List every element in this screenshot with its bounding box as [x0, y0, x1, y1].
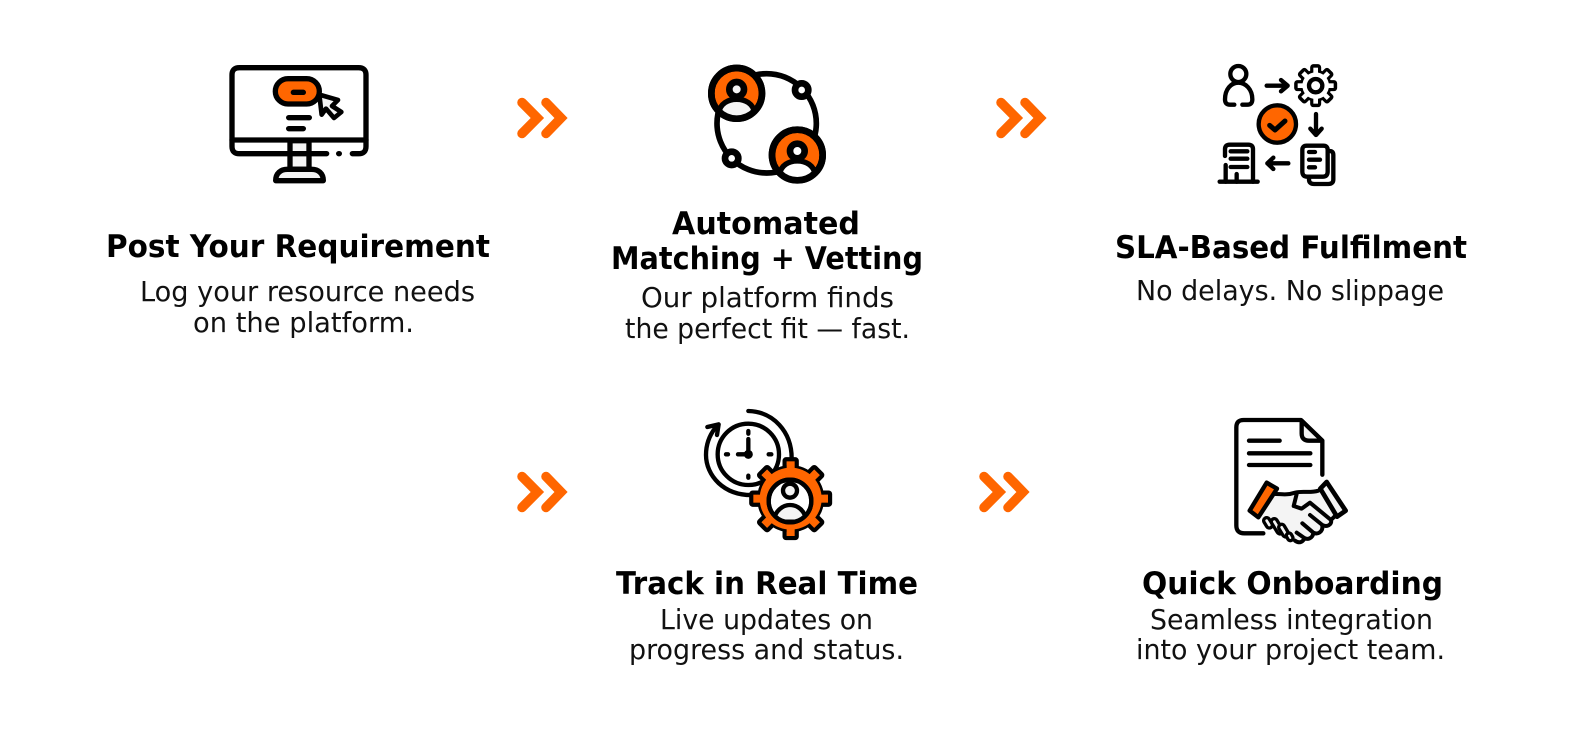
heading: Automated Matching + Vetting: Automated	[672, 206, 860, 242]
description: Seamless integration into your project team.: into your project team.	[1136, 633, 1445, 666]
description: Log your resource needs on the platform.: on the platform.	[193, 306, 414, 339]
description: Log your resource needs on the platform.: Log your resource needs	[140, 275, 475, 308]
arrow: step 2 to step 3	[1001, 102, 1040, 134]
icon: monitor with cursor	[232, 68, 366, 181]
step 1: post your requirement	[106, 68, 490, 339]
description: Log your resource needs on the platform.	[140, 275, 475, 339]
icon: contract with handshake	[1236, 420, 1346, 543]
heading: Post Your Requirement: Post Your Requirement	[106, 229, 490, 265]
icon: SLA workflow cycle	[1220, 66, 1335, 184]
icon: connected people network	[711, 68, 823, 183]
arrow: into step 4	[522, 476, 561, 508]
arrow: step 4 to step 5	[984, 476, 1023, 508]
description: Live updates on progress and status.	[629, 603, 904, 666]
step 3: SLA-based fulfilment	[1115, 66, 1467, 307]
description: Seamless integration into your project team.	[1136, 603, 1445, 666]
heading: Automated Matching + Vetting	[611, 206, 923, 277]
step 4: track in real time	[616, 411, 918, 666]
description: No delays. No slippage: No delays. No slippage	[1136, 274, 1444, 307]
description: Live updates on progress and status.: progress and status.	[629, 633, 904, 666]
description: Live updates on progress and status.: Live updates on	[660, 603, 873, 636]
icon: clock with person gear	[706, 411, 830, 538]
heading: SLA-Based Fulfilment: SLA-Based Fulfilment	[1115, 230, 1467, 266]
description: Our platform finds the perfect fit: Our platform finds	[641, 281, 894, 314]
heading: Automated Matching + Vetting: Matching + Vetting	[611, 241, 923, 277]
description: Seamless integration into your project team.: Seamless integration	[1150, 603, 1433, 636]
description: Our platform finds the perfect fit	[625, 281, 910, 345]
heading: Quick Onboarding: Quick Onboarding	[1142, 566, 1443, 602]
arrow: step 1 to step 2	[522, 102, 561, 134]
heading: Track in Real Time: Track in Real Time	[616, 566, 918, 602]
description: Our platform finds the perfect fit: the perfect fit — fast.	[625, 312, 910, 345]
step 5: quick onboarding	[1136, 420, 1445, 666]
step 2: automated matching and vetting	[611, 68, 923, 345]
